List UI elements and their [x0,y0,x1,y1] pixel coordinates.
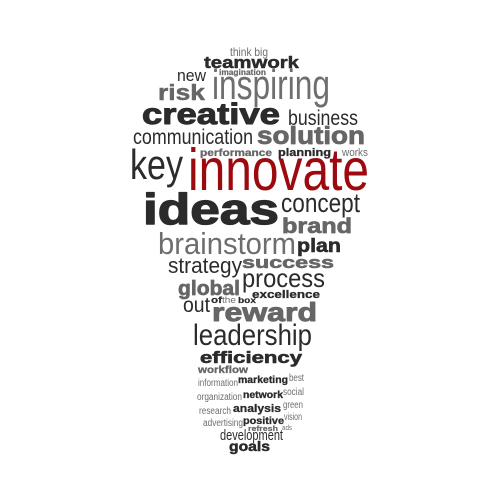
word: excellence: excellence [252,289,320,301]
word: research: research [199,406,231,417]
word: performance: performance [200,147,272,159]
word: refresh: refresh [248,424,278,433]
word: concept: concept [281,188,360,218]
word: global: global [178,278,240,300]
word: brand: brand [282,215,352,238]
word: out: out [183,294,210,317]
word: leadership: leadership [193,319,312,352]
word: plan: plan [297,236,341,257]
word: solution: solution [257,122,365,150]
word: risk: risk [158,80,206,105]
word: brainstorm: brainstorm [158,226,296,261]
word: process: process [242,263,325,293]
word: of: of [211,295,223,305]
word: box: box [238,296,257,305]
word: strategy: strategy [168,253,242,278]
word: reward: reward [212,297,317,327]
word: social: social [283,387,304,398]
word: positive: positive [243,416,284,427]
word: new: new [177,66,207,85]
word: best: best [289,373,304,384]
word: business: business [288,107,358,130]
word: creative: creative [142,98,280,131]
bulb base section [197,348,304,454]
word: efficiency: efficiency [200,348,303,367]
word: innovate (highlight): innovate [188,137,369,203]
word: vision: vision [284,412,302,423]
word: ads: ads [282,423,292,432]
word: network: network [243,390,283,401]
word: ideas: ideas [143,185,279,234]
word: inspiring: inspiring [212,61,330,108]
word: teamwork: teamwork [204,53,300,72]
word: works: works [341,147,368,159]
bulb top section [133,45,365,150]
word: green: green [283,400,303,411]
word: communication: communication [133,126,253,149]
word: organization: organization [197,392,242,403]
word: advertising: advertising [203,418,243,429]
bulb middle section [130,137,369,352]
word: marketing: marketing [238,375,288,386]
word: analysis: analysis [233,403,281,415]
word: workflow: workflow [197,365,248,376]
word: key: key [130,141,183,188]
word: development: development [220,427,284,444]
word: think big: think big [230,45,268,59]
word: success: success [242,253,334,272]
word: goals: goals [229,438,270,454]
word: information: information [198,378,238,389]
word: the: the [222,295,236,306]
word: planning: planning [278,147,331,159]
word: imagination: imagination [219,68,266,77]
